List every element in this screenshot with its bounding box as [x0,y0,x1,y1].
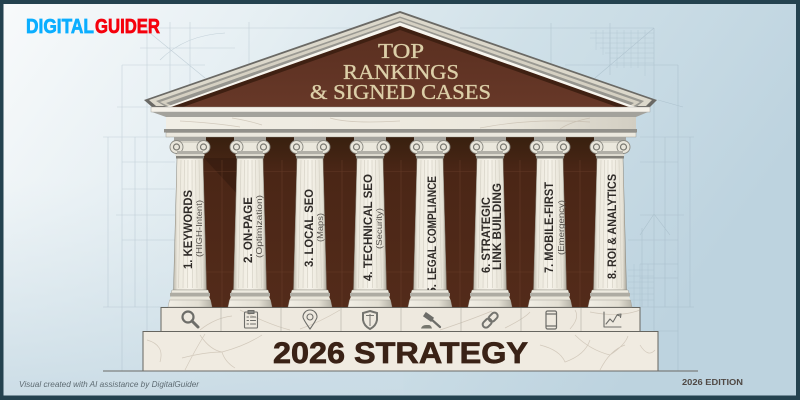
stylobate step with icons [161,308,640,332]
column 3: (Maps) [316,213,325,242]
pediment title [310,39,491,104]
column 1: 1. KEYWORDS [181,190,195,269]
column 7: (Emergency) [557,200,566,255]
icon: clipboard checklist [244,310,258,328]
ground line [103,370,698,372]
pediment [144,11,657,107]
blueprint lines right [460,23,694,371]
blueprint lines left [103,22,400,371]
column 3: 3. LOCAL SEO [302,189,316,267]
column 5: LEGAL COMPLIANCE [425,176,439,280]
column 1: (HIGH-Intent) [195,200,204,257]
column 2: 2. ON-PAGE [241,197,255,263]
column 8 [588,137,632,307]
pediment title: TOP [378,39,424,63]
2026 strategy label: 2026 STRATEGY [273,337,528,370]
icon: gavel [421,313,440,328]
icon: line chart [604,312,621,327]
logo: DIGITAL [26,15,94,38]
pediment title: & SIGNED CASES [310,80,491,104]
column 2: (Optimization) [255,195,264,258]
column 6: 6. STRATEGIC [479,197,493,273]
pediment title: RANKINGS [343,60,459,84]
column 7 [528,137,572,307]
column 3 [288,137,332,307]
back wall [190,137,610,307]
entablature [151,107,650,137]
column 5: 5. [425,284,439,294]
column 6: LINK BUILDING [490,183,504,270]
icon: magnifier [182,312,198,327]
pediment tympanum [171,26,629,107]
icon: shield [363,311,377,329]
edition label: 2026 EDITION [682,377,743,387]
icon: map pin [303,310,317,329]
base step: 2026 strategy [143,332,658,371]
icon: smartphone [546,311,556,329]
column 2 [228,137,272,307]
column 5 [408,137,452,307]
credit note: Visual created with AI assistance by DigitalGuider [19,379,200,389]
column 6 [468,137,512,307]
column 4: 4. TECHNICAL SEO [361,174,375,281]
column 7: 7. MOBILE-FIRST [542,181,556,273]
column 8: 8. ROI & ANALYTICS [605,174,619,279]
column 4: (Security) [375,208,384,249]
logo: GUIDER [95,15,160,38]
logo [26,15,160,38]
column 4 [348,137,392,307]
icon: chain link [481,311,499,329]
column 1 [168,137,212,307]
